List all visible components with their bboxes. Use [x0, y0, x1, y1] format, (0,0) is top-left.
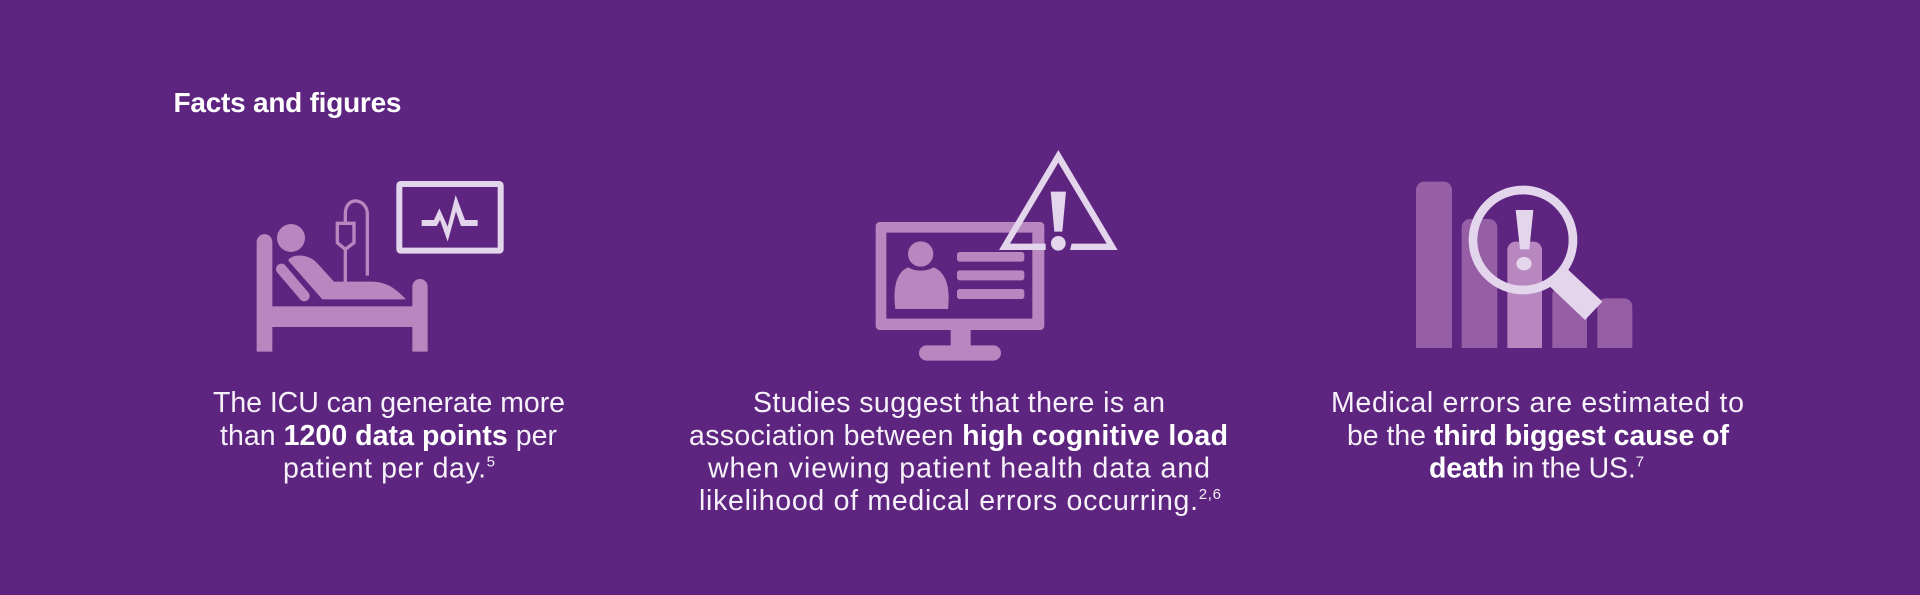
bed frame	[257, 234, 428, 352]
heart monitor	[399, 184, 501, 251]
patient arm	[281, 269, 304, 296]
text block: cognitive load: 2,6	[1199, 486, 1221, 503]
patient body	[288, 256, 406, 299]
monitor stand	[919, 330, 1001, 361]
magnifying glass	[1473, 190, 1602, 320]
text block: medical errors: death in the US.	[1429, 452, 1636, 484]
monitor screen frame	[876, 222, 1044, 330]
text block: medical errors: Medical errors are estimated to	[1331, 387, 1744, 419]
text block: cognitive load: association between high cognitive load	[689, 420, 1228, 452]
record lines	[957, 252, 1024, 299]
heading: Facts and figures	[174, 87, 402, 118]
IV drip stand	[337, 201, 367, 282]
text block: medical errors: be the third biggest cause of	[1347, 420, 1730, 452]
text block: medical errors: 7	[1636, 454, 1644, 470]
text block: cognitive load: likelihood of medical errors occurring.	[699, 485, 1198, 517]
text block: cognitive load: when viewing patient health data and	[707, 452, 1210, 484]
text block: cognitive load: Studies suggest that there is an	[753, 387, 1165, 419]
patient avatar	[895, 241, 949, 309]
patient head	[277, 224, 305, 252]
text block: ICU data points: The ICU can generate more	[213, 387, 565, 419]
text block: ICU data points: 5	[487, 454, 495, 470]
text block: ICU data points: patient per day.	[283, 452, 486, 484]
icon: bar chart with magnifying glass	[1416, 182, 1632, 348]
text block: medical errors	[1331, 387, 1744, 484]
icon: patient in ICU bed with monitor	[257, 184, 501, 352]
text block: ICU data points	[213, 387, 565, 484]
text block: ICU data points: than 1200 data points per	[220, 420, 558, 452]
text block: cognitive load	[689, 387, 1228, 517]
icon: computer monitor with patient record and warning	[876, 150, 1118, 361]
bars	[1416, 182, 1632, 348]
warning triangle	[999, 150, 1118, 251]
